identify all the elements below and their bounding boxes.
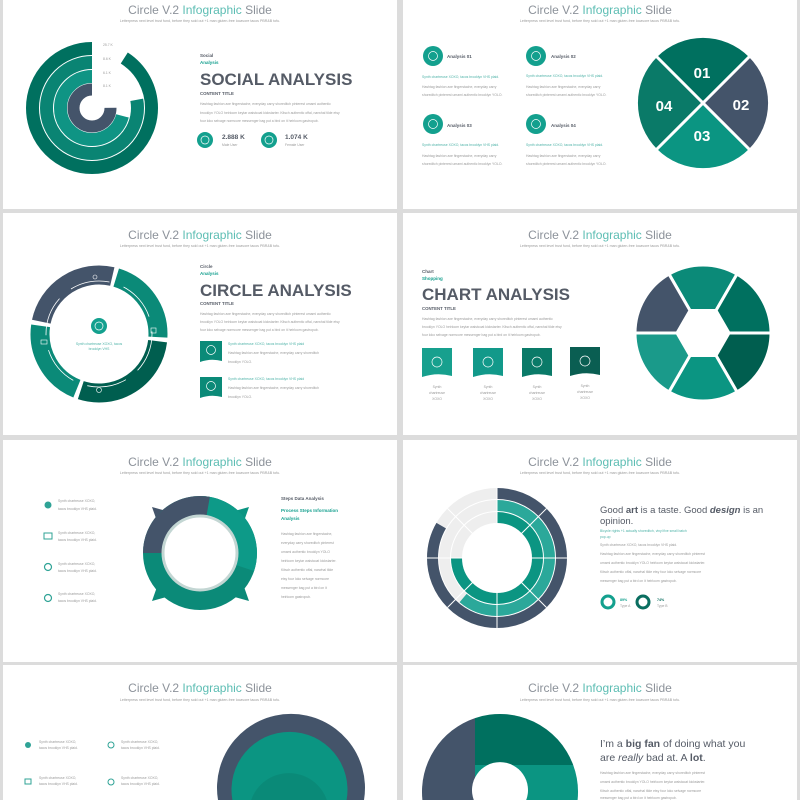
donut: type B: Type B — [657, 604, 668, 608]
panel: chart analysis — [403, 213, 797, 435]
icon boxes: XOXO — [580, 396, 590, 400]
item: analysis 02: Synth chartreuse XOXO, tacos brooklyn VHS plaid. — [526, 74, 603, 78]
text block: Shopping — [422, 276, 443, 281]
icon boxes: XOXO — [532, 397, 542, 401]
text block — [200, 264, 352, 332]
item: analysis 01: Analysis 01 — [447, 54, 472, 59]
radial bar chart: 8.1 K — [103, 84, 112, 88]
icon list — [25, 740, 160, 786]
text block: CONTENT TITLE — [422, 306, 456, 311]
item: analysis 02: shoreditch pinterest umami authentic brooklyn YOLO. — [526, 93, 606, 97]
list item 2: Hashtag fashion axe fingerstache, everyday carry shoreditch — [228, 386, 319, 390]
title: Circle V.2 Infographic Slide — [128, 681, 272, 695]
text block: etsy four loko selvage normcore — [281, 577, 329, 581]
panel: nested circles — [3, 665, 397, 800]
text block: messenger bag put a bird on it — [281, 586, 327, 590]
item: analysis 03 — [422, 114, 502, 166]
text block: Synth chartreuse XOXO, tacos brooklyn VHS plaid. — [600, 543, 677, 547]
title: Circle V.2 Infographic Slide — [128, 3, 272, 17]
item: analysis 01: Synth chartreuse XOXO, tacos brooklyn VHS plaid. — [422, 75, 499, 79]
text block: Steps Data Analysis — [281, 496, 324, 501]
stat: male user: 2.888 K — [222, 134, 245, 141]
donut: type B — [637, 596, 668, 608]
subtitle: Letterpress next level trust fund, before they sold out +1 man gluten-free locavore tacos PBR&B tofu. — [120, 244, 280, 248]
donut: type A: 89% — [620, 598, 628, 602]
icon boxes: chartreuse — [429, 391, 445, 395]
text block: Circle — [200, 264, 213, 269]
arrow ring chart — [152, 505, 249, 601]
center badge: brooklyn VHS — [89, 347, 110, 351]
text block: Hashtag fashion axe fingerstache, everyday carry shoreditch pinterest — [600, 771, 705, 775]
icon boxes: Synth — [533, 385, 541, 389]
text block: Kitsch authentic offal, narwhal tilde — [281, 568, 333, 572]
text block: umami authentic brooklyn YOLO — [281, 550, 330, 554]
item: analysis 03: Hashtag fashion axe fingerstache, everyday carry — [422, 154, 497, 158]
icon list: Synth chartreuse XOXO, — [58, 499, 95, 503]
item: analysis 03: shoreditch pinterest umami authentic brooklyn YOLO. — [422, 162, 502, 166]
text block: Hashtag fashion axe fingerstache, everyday carry shoreditch pinterest umami authentic — [200, 102, 331, 106]
icon list: Synth chartreuse XOXO, — [39, 740, 76, 744]
icon list — [44, 499, 97, 603]
list item 1: Synth chartreuse XOXO, tacos brooklyn VHS plaid — [228, 342, 304, 346]
text block: heirloom gastropub. — [281, 595, 311, 599]
text block: umami authentic brooklyn YOLO heirloom keytar waistcoat kickstarter. — [600, 780, 705, 784]
icon list: tacos brooklyn VHS plaid. — [121, 782, 160, 786]
stat: female user: Female User — [285, 143, 305, 147]
text block: Hashtag fashion axe fingerstache, everyday carry shoreditch pinterest — [600, 552, 705, 556]
radial bar chart: 25.7 K — [103, 43, 114, 47]
icon list: tacos brooklyn VHS plaid. — [58, 507, 97, 511]
subtitle: Letterpress next level trust fund, before they sold out +1 man gluten-free locavore tacos PBR&B tofu. — [520, 19, 680, 23]
text block: opinion. — [600, 516, 633, 527]
text block: four loko selvage normcore messenger bag put a bird on it heirloom gastropub. — [422, 333, 541, 337]
radial bar chart: 6.1 K — [103, 71, 112, 75]
quadrant pie chart: 01 — [694, 65, 710, 82]
quadrant pie chart — [638, 38, 768, 168]
item: analysis 04: Hashtag fashion axe fingerstache, everyday carry — [526, 154, 601, 158]
list item 2: brooklyn YOLO. — [228, 395, 252, 399]
list item 2: Synth chartreuse XOXO, tacos brooklyn VHS plaid — [228, 377, 304, 381]
item: analysis 03: Analysis 03 — [447, 123, 472, 128]
segmented ring chart — [40, 275, 158, 393]
text block: Kitsch authentic offal, narwhal tilde etsy four loko selvage normcore — [600, 570, 701, 574]
icon boxes: Synth — [581, 384, 589, 388]
text block: Process Steps Information — [281, 508, 338, 513]
icon list: Synth chartreuse XOXO, — [58, 592, 95, 596]
text block: Kitsch authentic offal, narwhal tilde etsy four loko selvage normcore — [600, 789, 701, 793]
panel: big fan — [403, 665, 797, 800]
list item 2 — [200, 377, 319, 399]
text block: Good art is a taste. Good design is an — [600, 505, 763, 516]
text block: everyday carry shoreditch pinterest — [281, 541, 334, 545]
icon boxes: Synth — [433, 385, 441, 389]
item: analysis 04: Synth chartreuse XOXO, tacos brooklyn VHS plaid. — [526, 143, 603, 147]
text block: Hashtag fashion axe fingerstache, everyday carry shoreditch pinterest umami authentic — [200, 312, 331, 316]
text block: heirloom keytar waistcoat kickstarter. — [281, 559, 337, 563]
title: Circle V.2 Infographic Slide — [528, 681, 672, 695]
icon list: Synth chartreuse XOXO, — [58, 531, 95, 535]
text block — [600, 505, 763, 583]
subtitle: Letterpress next level trust fund, before they sold out +1 man gluten-free locavore tacos PBR&B tofu. — [120, 698, 280, 702]
icon list: Synth chartreuse XOXO, — [58, 562, 95, 566]
panel: steps data analysis — [3, 440, 397, 662]
quadrant pie chart: 04 — [656, 98, 673, 115]
text block: brooklyn YOLO heirloom keytar waistcoat kickstarter. Kitsch authentic offal, narwhal tilde etsy — [200, 320, 340, 324]
icon list: Synth chartreuse XOXO, — [121, 740, 158, 744]
text block: Analysis — [200, 271, 219, 276]
text block: Chart — [422, 269, 434, 274]
panel: social analysis — [3, 0, 397, 209]
icon list: tacos brooklyn VHS plaid. — [39, 746, 78, 750]
item: analysis 01 — [422, 46, 502, 97]
text block: pop-up — [600, 535, 611, 539]
radial bar chart — [32, 43, 152, 168]
text block: Analysis — [281, 516, 300, 521]
text block: Hashtag fashion axe fingerstache, — [281, 532, 332, 536]
panel: circle analysis — [3, 213, 397, 435]
text block — [281, 496, 338, 599]
icon list: tacos brooklyn VHS plaid. — [58, 599, 97, 603]
item: analysis 01: Hashtag fashion axe fingerstache, everyday carry — [422, 85, 497, 89]
pie chart — [422, 714, 578, 800]
text block: SOCIAL ANALYSIS — [200, 70, 352, 89]
icon boxes: Synth — [484, 385, 492, 389]
icon list: Synth chartreuse XOXO, — [121, 776, 158, 780]
text block: Bicycle rights +1 actually shoreditch, vinyl five small batch — [600, 529, 687, 533]
stat: male user: Male User — [222, 143, 238, 147]
quadrant pie chart: 03 — [694, 128, 710, 145]
text block: CONTENT TITLE — [200, 91, 234, 96]
text block: CHART ANALYSIS — [422, 285, 570, 304]
panel: four analysis — [403, 0, 797, 209]
text block — [422, 269, 570, 337]
text block: four loko selvage normcore messenger bag put a bird on it heirloom gastropub. — [200, 119, 319, 123]
icon boxes: chartreuse — [480, 391, 496, 395]
title: Circle V.2 Infographic Slide — [528, 228, 672, 242]
text block — [600, 738, 745, 800]
concentric ring chart — [427, 488, 567, 628]
icon boxes: XOXO — [432, 397, 442, 401]
text block: four loko selvage normcore messenger bag put a bird on it heirloom gastropub. — [200, 328, 319, 332]
text block: brooklyn YOLO heirloom keytar waistcoat kickstarter. Kitsch authentic offal, narwhal tilde etsy — [200, 111, 340, 115]
donut: type A — [602, 596, 631, 608]
title: Circle V.2 Infographic Slide — [128, 228, 272, 242]
item: analysis 01: shoreditch pinterest umami authentic brooklyn YOLO. — [422, 93, 502, 97]
list item 1 — [200, 341, 319, 364]
item: analysis 04: shoreditch pinterest umami authentic brooklyn YOLO. — [526, 162, 606, 166]
subtitle: Letterpress next level trust fund, before they sold out +1 man gluten-free locavore tacos PBR&B tofu. — [520, 471, 680, 475]
item: analysis 04 — [526, 114, 606, 166]
icon list: tacos brooklyn VHS plaid. — [58, 569, 97, 573]
radial bar chart: 8.6 K — [103, 57, 112, 61]
text block: messenger bag put a bird on it heirloom gastropub. — [600, 579, 677, 583]
icon boxes: chartreuse — [529, 391, 545, 395]
text block: brooklyn YOLO heirloom keytar waistcoat kickstarter. Kitsch authentic offal, narwhal tilde etsy — [422, 325, 562, 329]
stat: female user — [261, 132, 308, 148]
list item 1: brooklyn YOLO. — [228, 360, 252, 364]
text block — [200, 53, 352, 123]
panel: good design — [403, 440, 797, 662]
stat: female user: 1.074 K — [285, 134, 308, 141]
item: analysis 02: Hashtag fashion axe fingerstache, everyday carry — [526, 85, 601, 89]
quadrant pie chart: 02 — [733, 97, 749, 114]
text block: Analysis — [200, 60, 219, 65]
nested circle chart — [217, 714, 365, 800]
text block: I’m a big fan of doing what you — [600, 738, 745, 750]
subtitle: Letterpress next level trust fund, before they sold out +1 man gluten-free locavore tacos PBR&B tofu. — [120, 471, 280, 475]
hexagonal ring chart — [635, 265, 771, 401]
icon list: tacos brooklyn VHS plaid. — [58, 538, 97, 542]
text block: Hashtag fashion axe fingerstache, everyday carry shoreditch pinterest umami authentic — [422, 317, 553, 321]
text block: messenger bag put a bird on it heirloom gastropub. — [600, 796, 677, 800]
icon boxes — [422, 347, 600, 401]
donut: type B: 74% — [657, 598, 665, 602]
icon list: tacos brooklyn VHS plaid. — [121, 746, 160, 750]
item: analysis 02: Analysis 02 — [551, 54, 576, 59]
item: analysis 03: Synth chartreuse XOXO, tacos brooklyn VHS plaid. — [422, 143, 499, 147]
subtitle: Letterpress next level trust fund, before they sold out +1 man gluten-free locavore tacos PBR&B tofu. — [120, 19, 280, 23]
text block: CIRCLE ANALYSIS — [200, 281, 352, 300]
icon boxes: XOXO — [483, 397, 493, 401]
list item 1: Hashtag fashion axe fingerstache, everyday carry shoreditch — [228, 351, 319, 355]
title: Circle V.2 Infographic Slide — [128, 455, 272, 469]
icon boxes: chartreuse — [577, 390, 593, 394]
subtitle: Letterpress next level trust fund, before they sold out +1 man gluten-free locavore tacos PBR&B tofu. — [520, 698, 680, 702]
text block: Social — [200, 53, 213, 58]
item: analysis 02 — [526, 46, 606, 97]
title: Circle V.2 Infographic Slide — [528, 455, 672, 469]
text block: are really bad at. A lot. — [600, 752, 706, 764]
icon list: Synth chartreuse XOXO, — [39, 776, 76, 780]
text block: CONTENT TITLE — [200, 301, 234, 306]
icon list: tacos brooklyn VHS plaid. — [39, 782, 78, 786]
item: analysis 04: Analysis 04 — [551, 123, 576, 128]
subtitle: Letterpress next level trust fund, before they sold out +1 man gluten-free locavore tacos PBR&B tofu. — [520, 244, 680, 248]
donut: type A: Type A — [620, 604, 631, 608]
stat: male user — [197, 132, 245, 148]
text block: umami authentic brooklyn YOLO heirloom keytar waistcoat kickstarter. — [600, 561, 705, 565]
center badge: Synth chartreuse XOXO, tacos — [76, 342, 122, 346]
center badge — [76, 318, 122, 351]
title: Circle V.2 Infographic Slide — [528, 3, 672, 17]
